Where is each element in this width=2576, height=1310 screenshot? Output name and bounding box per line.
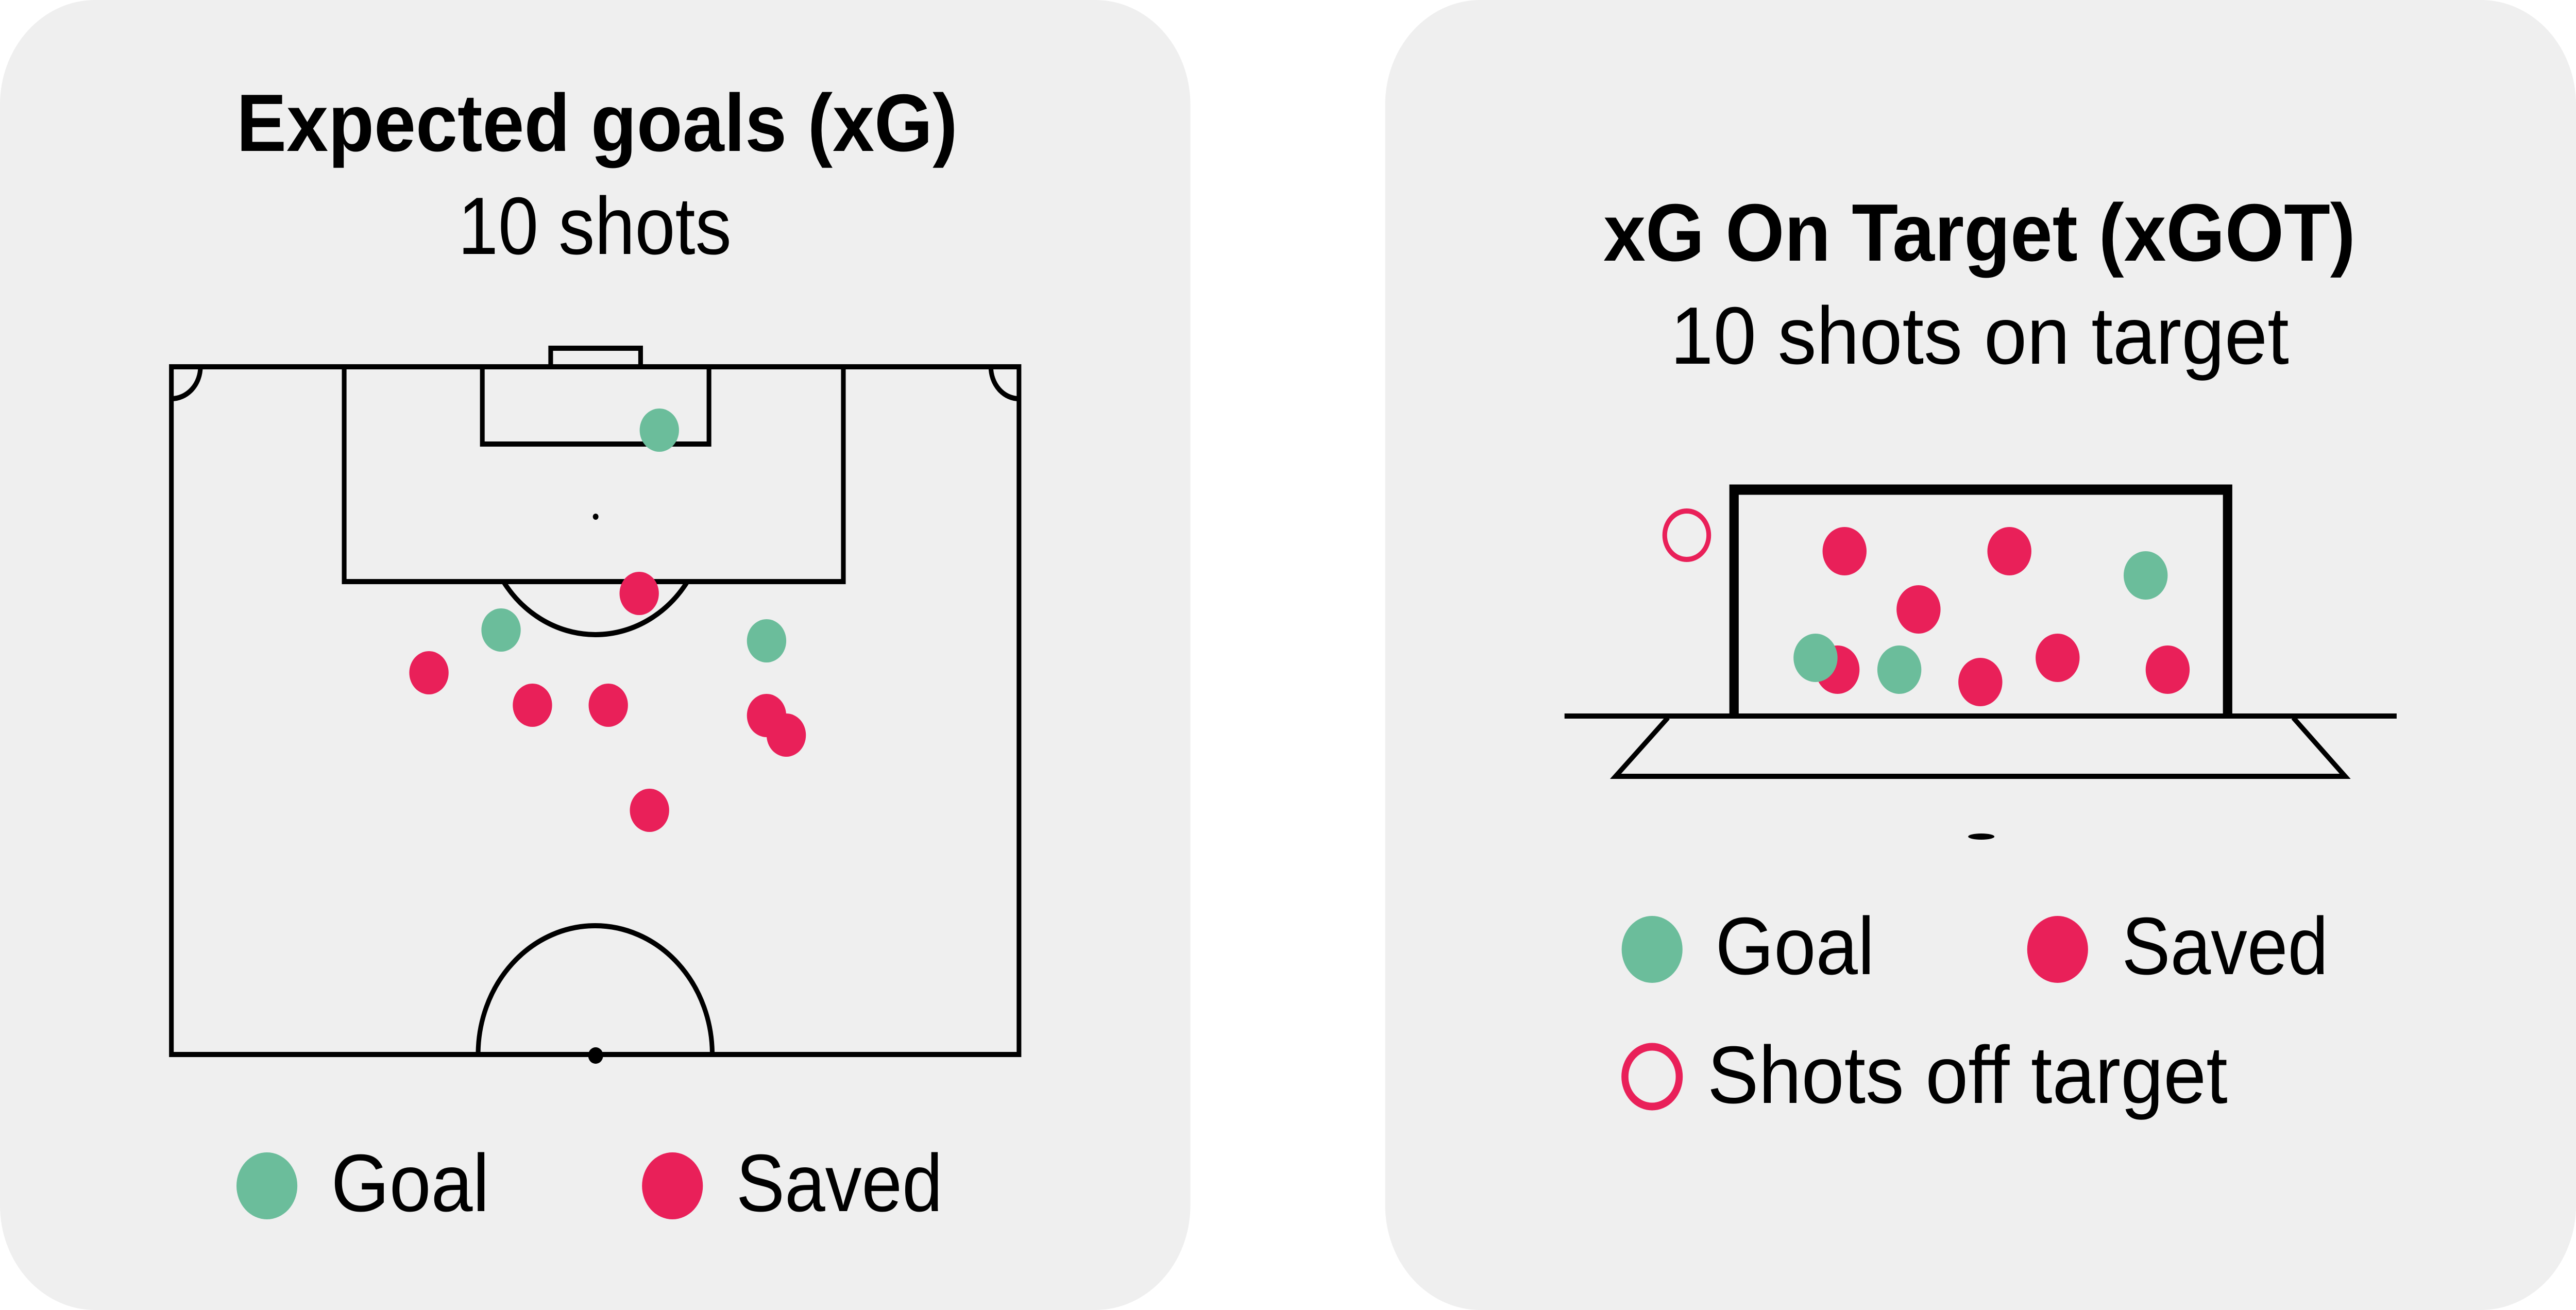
legend: goal, saved, shots off target: Shots off target (1707, 1029, 2228, 1120)
subheading: 10 shots on target: 10 shots on target (1670, 290, 2289, 381)
shots: goals (481, 409, 786, 662)
shots: saved (1816, 527, 2190, 706)
goal frame and six-yard box (1565, 489, 2397, 840)
heading: xG On Target (xGOT): xG On Target (xGOT) (1603, 187, 2355, 278)
legend: goal and saved: Goal (331, 1137, 489, 1228)
pitch markings (172, 348, 1019, 1064)
legend: goal, saved, shots off target: Saved (2122, 900, 2328, 991)
chart: goal mouth with shot placement (1565, 489, 2397, 840)
panel: xG on target (1385, 0, 2576, 1310)
shots: goals (1793, 551, 2167, 694)
legend: goal, saved, shots off target (1622, 900, 2328, 1120)
chart: football pitch with shot locations (172, 348, 1019, 1064)
panel: expected goals (0, 0, 1190, 1310)
subheading: 10 shots: 10 shots (458, 180, 732, 271)
legend: goal and saved (236, 1137, 943, 1228)
legend: goal, saved, shots off target: Goal (1715, 900, 1874, 991)
shot off target (1665, 511, 1709, 559)
shots: saved (409, 572, 806, 832)
heading: Expected goals (xG): Expected goals (xG) (236, 77, 958, 168)
legend: goal and saved: Saved (736, 1137, 943, 1228)
